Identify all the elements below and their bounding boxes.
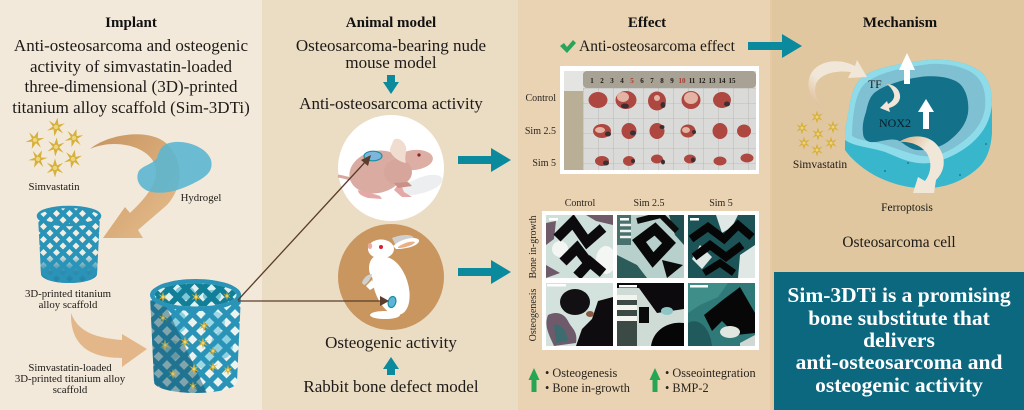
callout: conclusion: Sim-3DTi is a promising (787, 283, 1011, 307)
photo: excised tumors on grid: 11 (689, 77, 696, 85)
label: simvastatin-loaded scaffold (15, 362, 126, 396)
label: osteosarcoma cell: Osteosarcoma cell (842, 234, 956, 251)
photo: excised tumors on grid: 2 (600, 77, 604, 85)
labels: histology rows: Bone in-growth (528, 215, 539, 279)
icon: green up arrow 1 (528, 368, 540, 392)
icon: simvastatin-loaded scaffold (148, 279, 244, 395)
illustration: rabbit (338, 224, 444, 330)
illustration: nude mouse (338, 115, 444, 221)
text: study description: titanium alloy scaffold (Sim-3DTi) (12, 98, 250, 117)
text: osteogenesis and bone in-growth: • Bone in-growth (545, 381, 630, 395)
photo: excised tumors on grid: 7 (650, 77, 654, 85)
text: osteogenic activity: Osteogenic activity (325, 333, 457, 352)
heading: implant: Implant (105, 15, 157, 31)
text: nude mouse model: mouse model (345, 53, 437, 72)
text: osteogenesis and bone in-growth: • Osteogenesis (545, 366, 617, 380)
labels: histology rows: Osteogenesis (528, 289, 539, 341)
icon: green up arrow 2 (650, 368, 660, 392)
labels: tumor rows: Control (525, 93, 556, 104)
icon: check mark (560, 40, 576, 53)
text: nude mouse model: Osteosarcoma-bearing nude (296, 36, 486, 55)
labels: histology columns: Sim 5 (709, 198, 733, 209)
icon: simvastatin crystals (24, 116, 84, 178)
label: ferroptosis: Ferroptosis (881, 202, 933, 214)
arrow: effect to mechanism (748, 34, 802, 58)
labels: tumor rows (525, 93, 556, 169)
text: osseointegration and BMP-2: • BMP-2 (665, 381, 709, 395)
photo grid: histology sections (542, 211, 759, 350)
panel: animal model (262, 0, 518, 410)
text: nude mouse model (296, 36, 486, 72)
arrow: down to anti-osteosarcoma (383, 75, 399, 94)
label: hydrogel: Hydrogel (181, 192, 221, 204)
photo: excised tumors on grid: 3 (610, 77, 614, 85)
arrow: rabbit to effect (458, 260, 511, 284)
arrow: up to osteogenic (383, 357, 399, 375)
label: NOX2: NOX2 (879, 116, 911, 130)
text: osteogenesis and bone in-growth (545, 366, 630, 395)
panel: mechanism (770, 0, 1024, 410)
connector: scaffold to mouse (238, 155, 371, 300)
arrow: hydrogel to scaffold (90, 134, 180, 238)
callout: conclusion: delivers (863, 328, 935, 352)
arrow: to ferroptosis (899, 136, 944, 193)
photo: excised tumors on grid: 9 (670, 77, 674, 85)
icon: simvastatin crystals (796, 110, 839, 157)
illustration: osteosarcoma cell (845, 60, 992, 188)
heading: mechanism: Mechanism (863, 15, 938, 31)
panel: effect (518, 0, 770, 410)
text: osseointegration and BMP-2: • Osseointegration (665, 366, 756, 380)
label: simvastatin-loaded scaffold: scaffold (53, 384, 88, 396)
panel: implant (12, 16, 250, 393)
arrow: scaffold to loaded scaffold (71, 313, 147, 367)
callout: conclusion: osteogenic activity (815, 373, 983, 397)
text: rabbit bone defect model: Rabbit bone defect model (303, 377, 479, 396)
text: study description (12, 36, 250, 117)
callout: conclusion: bone substitute that (808, 306, 991, 330)
label: simvastatin: Simvastatin (28, 181, 80, 193)
icon: white up arrow on NOX2 (918, 99, 934, 129)
arrow: mouse to effect (458, 148, 511, 172)
text: study description: activity of simvastatin-loaded (30, 57, 233, 76)
photo: excised tumors on grid: 6 (640, 77, 644, 85)
label: TF: TF (868, 79, 882, 91)
photo: excised tumors on grid: 14 (718, 77, 726, 85)
photo: excised tumors on grid: 1 (590, 77, 594, 85)
arrow: simvastatin to TF (808, 60, 867, 110)
connector: scaffold to rabbit (238, 296, 389, 306)
text: anti-osteosarcoma effect: Anti-osteosarcoma effect (579, 38, 736, 55)
icon: 3D-printed scaffold (36, 205, 104, 287)
photo: excised tumors on grid: 15 (728, 77, 736, 85)
label: simvastatin-loaded scaffold: Simvastatin-loaded (28, 362, 112, 374)
text: osseointegration and BMP-2 (665, 366, 756, 395)
labels: tumor rows: Sim 5 (532, 158, 556, 169)
label: simvastatin-loaded scaffold: 3D-printed titanium alloy (15, 373, 126, 385)
labels: histology columns (565, 198, 733, 209)
labels: tumor rows: Sim 2.5 (525, 126, 556, 137)
heading: effect: Effect (628, 15, 666, 31)
arrow: TF to NOX2 (880, 84, 900, 112)
text: study description: Anti-osteosarcoma and osteogenic (14, 36, 249, 55)
label: 3D-printed scaffold: alloy scaffold (39, 299, 98, 311)
label: 3D-printed scaffold: 3D-printed titanium (25, 288, 112, 300)
icon: white up arrow on TF (899, 53, 915, 84)
callout: conclusion: anti-osteosarcoma and (796, 350, 1002, 374)
heading: animal model: Animal model (346, 15, 436, 31)
photo: excised tumors on grid (560, 66, 759, 174)
labels: histology columns: Control (565, 198, 595, 209)
photo: excised tumors on grid: 10 (678, 77, 686, 85)
text: anti-osteosarcoma activity: Anti-osteosarcoma activity (299, 94, 483, 113)
labels: histology rows (528, 215, 539, 341)
text: study description: three-dimensional (3D)-printed (25, 77, 238, 96)
label: 3D-printed scaffold (25, 288, 112, 311)
label: simvastatin: Simvastatin (793, 159, 847, 171)
photo: excised tumors on grid: 8 (660, 77, 664, 85)
photo: excised tumors on grid: 12 (698, 77, 706, 85)
icon: hydrogel (137, 142, 212, 193)
photo: excised tumors on grid: 5 (630, 77, 634, 85)
labels: histology columns: Sim 2.5 (633, 198, 665, 209)
photo: excised tumors on grid: 4 (620, 77, 624, 85)
callout: conclusion (774, 272, 1024, 410)
photo: excised tumors on grid: 13 (708, 77, 716, 85)
